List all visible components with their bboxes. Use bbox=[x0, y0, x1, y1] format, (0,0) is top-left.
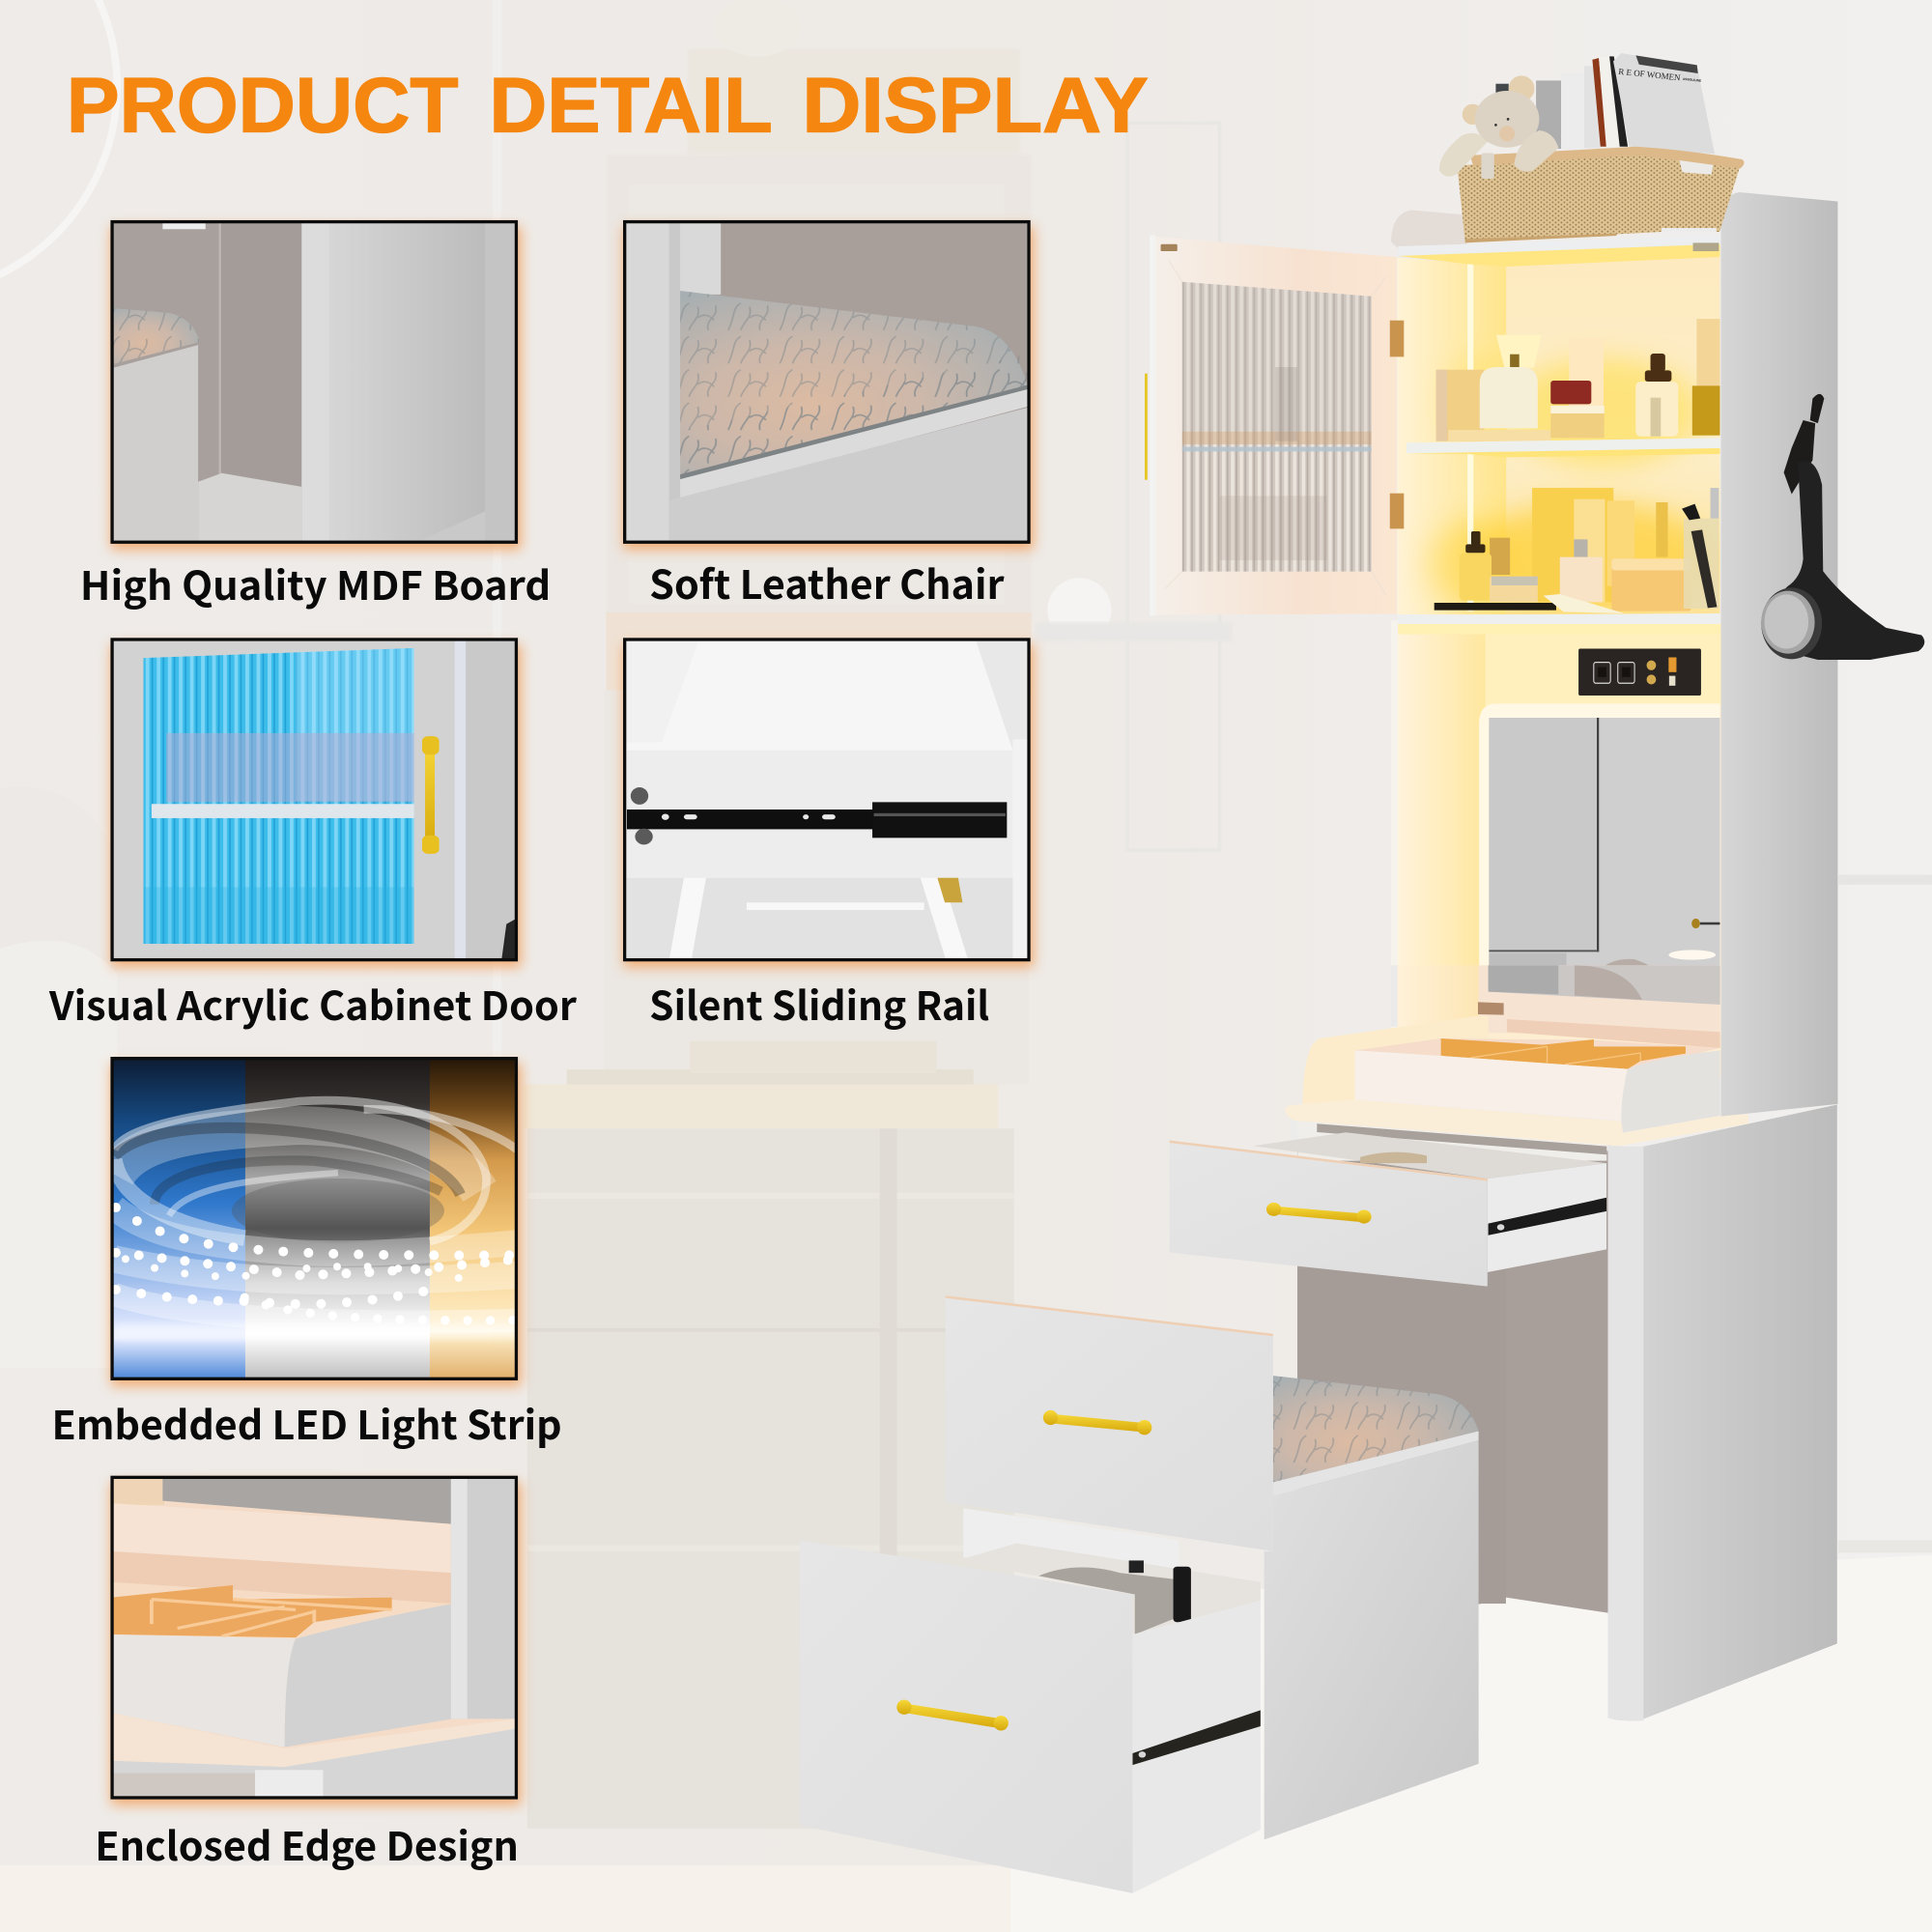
interior back and walls bbox=[1397, 251, 1719, 615]
hair dryer on hook bbox=[1761, 394, 1924, 660]
panel: visual acrylic cabinet door bbox=[111, 639, 522, 967]
caption: silent sliding rail: Silent Sliding Rail bbox=[649, 975, 989, 1032]
handle bbox=[1043, 1410, 1151, 1435]
top shelf bbox=[1398, 235, 1719, 267]
desk top bbox=[1285, 1099, 1748, 1161]
books bbox=[1495, 53, 1715, 154]
panel: high quality MDF board bbox=[111, 220, 522, 550]
crown bbox=[1391, 210, 1467, 248]
furniture: desk, make-up tray and organizer bbox=[1285, 965, 1748, 1161]
stool with leather seat bbox=[1264, 1376, 1479, 1839]
shelf 2 cosmetics bbox=[1398, 488, 1719, 635]
title: DISPLAY bbox=[802, 62, 1149, 149]
books: ASSOULINE bbox=[1683, 77, 1702, 83]
top pull-out drawer bbox=[1170, 1132, 1606, 1287]
tray front and side bbox=[1355, 1050, 1720, 1133]
bottom pull-out drawer with towel and bottles bbox=[800, 1508, 1261, 1893]
caption: visual acrylic cabinet door: Visual Acrylic Cabinet Door bbox=[48, 975, 577, 1032]
mirror bbox=[1479, 703, 1719, 1005]
panel: silent sliding rail bbox=[623, 639, 1034, 967]
panel: enclosed edge design bbox=[111, 1477, 522, 1805]
open acrylic door bbox=[1145, 235, 1404, 615]
panel: embedded LED light strip bbox=[111, 1058, 522, 1386]
title: PRODUCT bbox=[67, 62, 458, 149]
caption: soft leather chair: Soft Leather Chair bbox=[649, 554, 1005, 611]
caption: embedded LED light strip: Embedded LED Light Strip bbox=[52, 1394, 562, 1451]
books and teddy in woven basket bbox=[1439, 53, 1745, 242]
handle bbox=[896, 1700, 1009, 1730]
power outlet panel bbox=[1578, 649, 1701, 696]
caption: high quality MDF board: High Quality MDF Board bbox=[80, 554, 551, 611]
handle bbox=[1266, 1203, 1372, 1224]
furniture: lit cabinet with shelves, cosmetics and open acrylic door bbox=[1145, 235, 1719, 635]
books: R E OF WOMEN bbox=[1618, 67, 1682, 82]
panel: soft leather chair bbox=[623, 220, 1034, 550]
title: DETAIL bbox=[489, 62, 773, 149]
caption: enclosed edge design: Enclosed Edge Design bbox=[95, 1815, 519, 1872]
furniture: lower vanity base and legs bbox=[1290, 1104, 1837, 1720]
middle drawer front bbox=[946, 1295, 1273, 1551]
shelf 1 cosmetics bbox=[1406, 319, 1719, 457]
woven basket bbox=[1457, 147, 1745, 242]
teddy bear bbox=[1439, 75, 1558, 179]
organizer bbox=[1355, 1038, 1719, 1069]
furniture: hutch lower walls and mirror bbox=[1391, 210, 1721, 1079]
lower warm wall and back bbox=[1391, 620, 1721, 1079]
wall under mirror bbox=[1391, 965, 1720, 1048]
back tray wall bbox=[1302, 1016, 1489, 1105]
side pillar bbox=[1721, 192, 1837, 1117]
title bbox=[67, 62, 1149, 149]
